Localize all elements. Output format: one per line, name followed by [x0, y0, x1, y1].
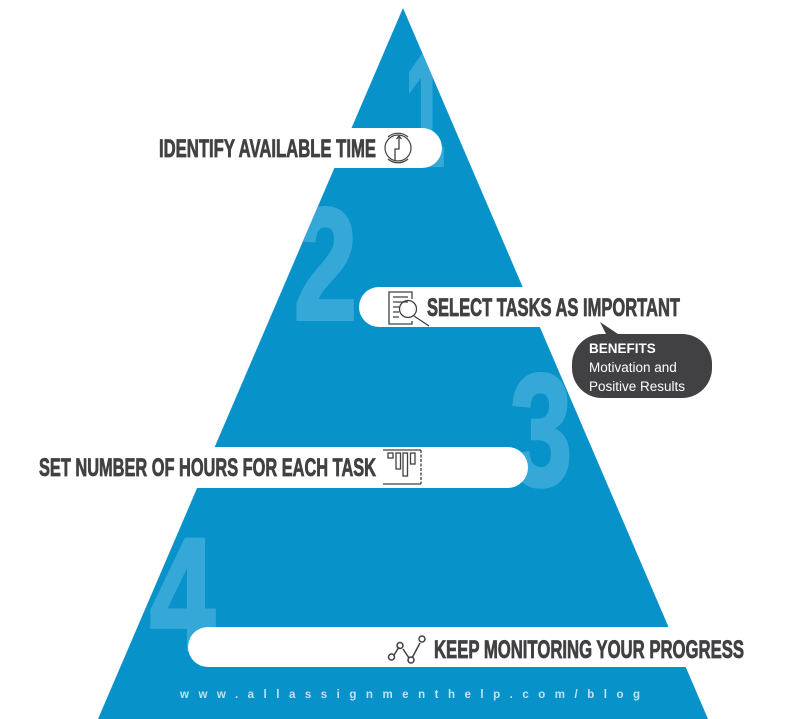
step 2: select tasks as important: SELECT TASKS AS IMPORTANT [427, 294, 680, 322]
icon: document with magnifier [389, 292, 429, 326]
callout: benefits: Motivation and [589, 360, 677, 375]
step 2: select tasks as important [359, 287, 699, 327]
step 1: identify available time [150, 128, 442, 168]
large step numbers: 4 [150, 505, 215, 683]
icon: bar chart [383, 450, 421, 484]
step 3: set number of hours [30, 447, 528, 488]
callout: benefits [572, 322, 712, 398]
step 1: identify available time: IDENTIFY AVAILABLE TIME [159, 135, 376, 163]
pyramid background [98, 8, 708, 719]
large step numbers [150, 54, 570, 651]
step 3: set number of hours: SET NUMBER OF HOURS FOR EACH TASK [39, 454, 376, 482]
step 4: keep monitoring your progress [188, 627, 754, 667]
large step numbers: 3 [510, 341, 572, 519]
website url: www.allassignmenthelp.com/blog [179, 689, 640, 701]
large step numbers: 1 [405, 21, 445, 199]
large step numbers: 2 [294, 175, 357, 353]
icon: clock [385, 133, 411, 163]
callout: benefits: Positive Results [589, 379, 685, 394]
callout: benefits: BENEFITS [589, 341, 656, 356]
icon: line graph [388, 636, 425, 663]
